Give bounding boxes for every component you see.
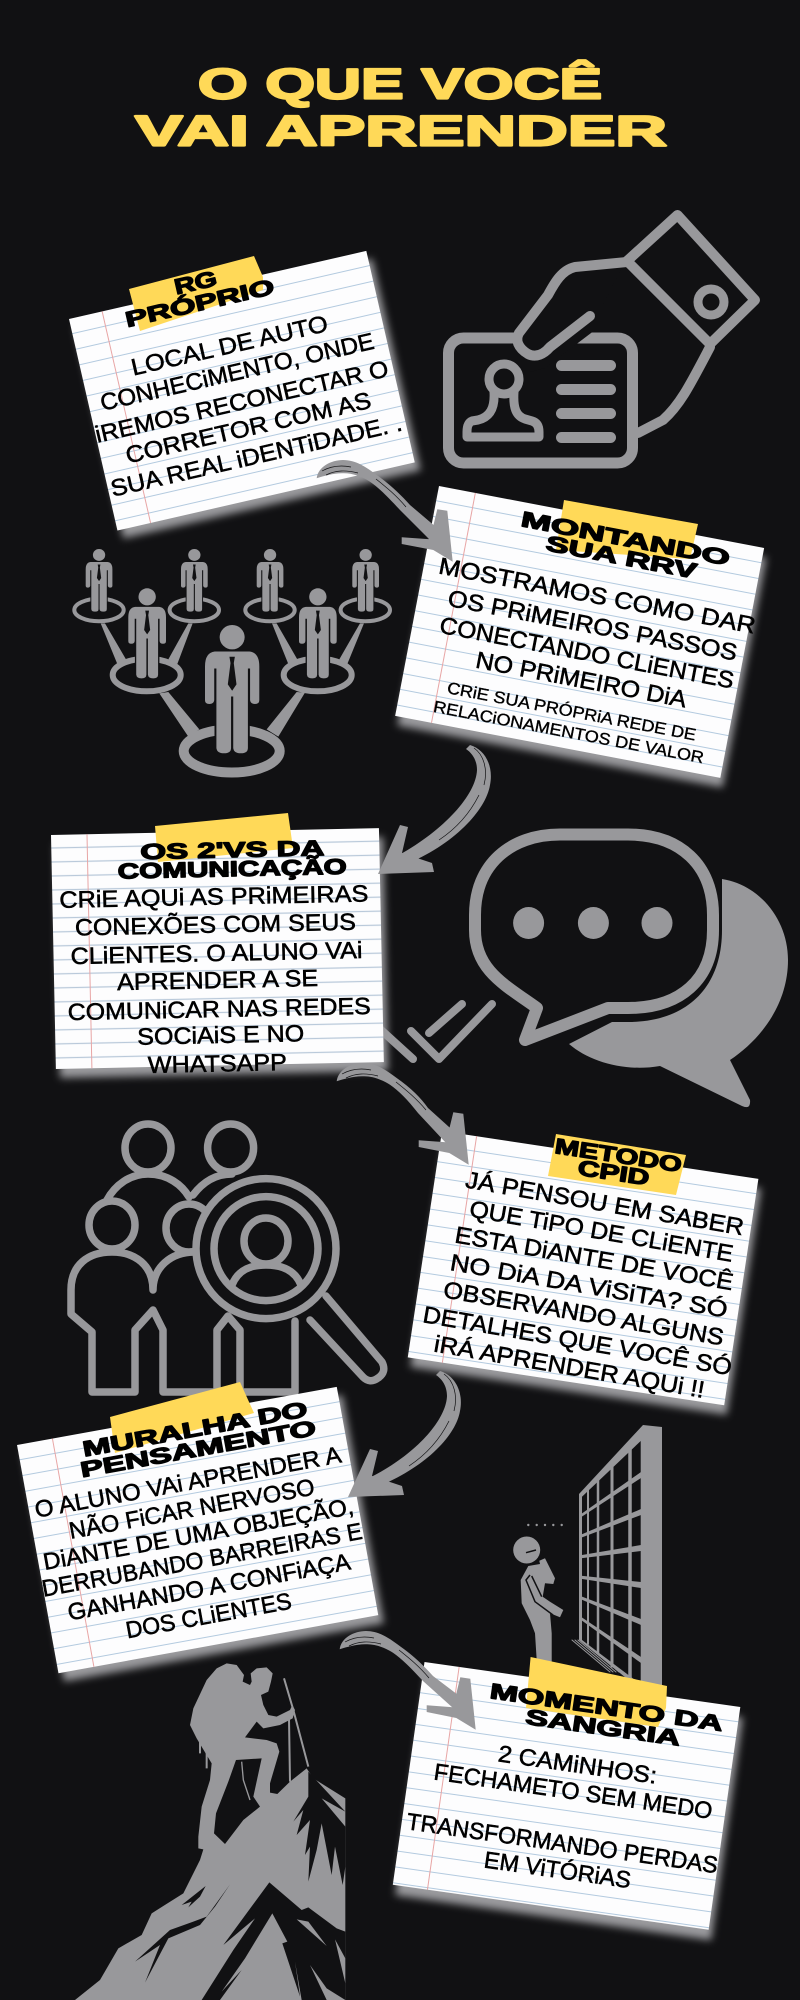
text: montando sua rrv: SUA RRV [544,531,700,584]
text: os 2 vs da comunicação: OS 2'VS DA [140,836,325,864]
text: muralha do pensamento [17,1391,374,1657]
text: muralha do pensamento: GANHANDO A CONFiAÇA [65,1548,353,1625]
text: os 2 vs da comunicação: CRiE AQUi AS PRiMEIRAS [59,880,369,913]
text: rg próprio: CONHECiMENTO, ONDE [98,328,376,416]
text: rg próprio: SUA REAL iDENTiDADE. . [108,410,404,502]
text: muralha do pensamento: NÃO FiCAR NERVOSO [67,1474,317,1544]
text: montando sua rrv: RELACiONAMENTOS DE VALOR [432,698,705,767]
panel: momento da sangria [391,1657,744,1940]
text: rg próprio: PRÓPRIO [123,274,277,332]
tape [556,500,698,559]
panel: os 2 vs da comunicação [51,813,388,1080]
text: método cpid: QUE TiPO DE CLiENTE [468,1196,735,1267]
text: método cpid: iRÁ APRENDER AQUi !! [432,1331,707,1403]
icon: man facing wall [513,1425,662,1690]
text: rg próprio: iREMOS RECONECTAR O [93,355,391,448]
text: os 2 vs da comunicação: SOCiAiS E NO [137,1020,304,1050]
tape [129,256,263,331]
text: os 2 vs da comunicação: WHATSAPP [148,1049,287,1078]
text: os 2 vs da comunicação: CONEXÕES COM SEUS [75,908,356,941]
tape [110,1382,254,1453]
text: momento da sangria: SANGRIA [524,1705,682,1751]
text: muralha do pensamento: DOS CLiENTES [124,1588,294,1643]
icon: speech bubbles [380,834,788,1107]
arrow: rg próprio to montando [317,460,453,562]
arrow: método to muralha [348,1371,461,1497]
title [135,60,667,156]
text: momento da sangria: EM ViTÓRiAS [482,1847,633,1893]
text: momento da sangria: FECHAMETO SEM MEDO [432,1759,714,1824]
text: método cpid: CPID [576,1156,651,1190]
text: momento da sangria: MOMENTO DA [488,1679,724,1736]
text: os 2 vs da comunicação [58,835,372,1080]
tape [548,1134,686,1195]
text: montando sua rrv: CRiE SUA PRÓPRiA REDE DE [446,678,698,744]
text: muralha do pensamento: MURALHA DO [81,1397,309,1462]
text: método cpid: OBSERVANDO ALGUNS [442,1276,726,1350]
text: método cpid: NO DiA DA ViSiTA? SÓ [448,1249,730,1323]
text: rg próprio [65,233,404,502]
panel: rg próprio [65,233,421,539]
text: muralha do pensamento: O ALUNO VAi APRENDER A [33,1441,344,1523]
text: momento da sangria: 2 CAMiNHOS: [497,1740,659,1789]
text: muralha do pensamento: PENSAMENTO [78,1416,318,1482]
arrow: os 2 vs to método [337,1063,469,1165]
text: montando sua rrv: MOSTRAMOS COMO DAR [437,553,758,639]
icon: people network [74,549,390,772]
icon: magnifier over people [71,1124,384,1392]
panel: montando sua rrv [393,486,769,787]
text: montando sua rrv: NO PRiMEIRO DiA [474,647,689,712]
text: montando sua rrv: MONTANDO [519,507,732,571]
text: muralha do pensamento: DiANTE DE UMA OBJEÇÃO, [41,1493,356,1575]
arrow: muralha to momento [340,1631,476,1730]
text: método cpid: ESTA DiANTE DE VOCÊ [453,1222,735,1295]
text: montando sua rrv: CONECTANDO CLiENTES [438,612,736,693]
text: momento da sangria: TRANSFORMANDO PERDAS [405,1808,720,1878]
text: momento da sangria [401,1670,739,1905]
text: os 2 vs da comunicação: COMUNICAÇÃO [118,854,347,884]
title: O QUE VOCÊ [198,60,602,108]
text: os 2 vs da comunicação: CLiENTES. O ALUNO VAi [70,937,363,969]
text: os 2 vs da comunicação: APRENDER A SE [117,965,318,995]
text: montando sua rrv [411,494,769,772]
text: montando sua rrv: OS PRiMEIROS PASSOS [446,585,739,666]
text: método cpid: DETALHES QUE VOCÊ SÓ [421,1301,734,1380]
tape [155,813,293,862]
text: os 2 vs da comunicação: COMUNiCAR NAS REDES [67,993,371,1025]
text: rg próprio: LOCAL DE AUTO [129,310,330,380]
text: muralha do pensamento: DERRUBANDO BARREIRAS E [40,1518,364,1602]
panel: muralha do pensamento [17,1382,384,1682]
arrow: montando to os 2 vs [378,745,491,874]
text: método cpid: METODO [553,1134,683,1177]
tape [526,1657,667,1727]
text: rg próprio: RG [172,266,219,299]
text: método cpid [415,1118,765,1407]
icon: hand holding id card [448,215,755,463]
text: rg próprio: CORRETOR COM AS [123,387,374,468]
icon: climber on mountain [75,1663,345,2000]
panel: método cpid [406,1118,765,1415]
text: método cpid: JÁ PENSOU EM SABER [464,1167,746,1240]
title: VAI APRENDER [135,108,667,156]
